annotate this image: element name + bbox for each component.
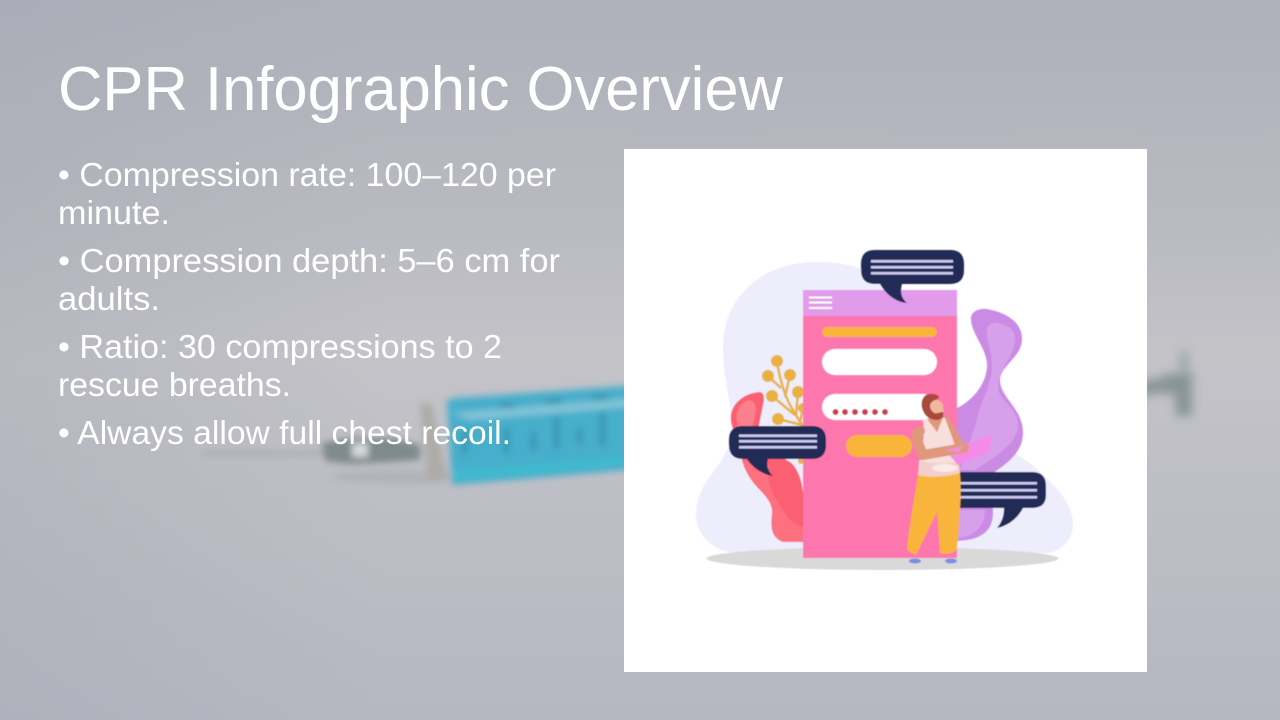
- illustration panel: [624, 149, 1147, 672]
- shoes: [909, 558, 957, 564]
- username field: [822, 349, 937, 375]
- bullet: chest recoil: • Always allow full chest recoil.: [58, 414, 511, 451]
- red blob: [731, 392, 803, 542]
- menu icon: [809, 296, 832, 309]
- speech bubble: right: [945, 472, 1046, 528]
- bullet: compression rate: minute.: [58, 194, 170, 231]
- arm and tablet: [917, 431, 993, 465]
- bullet: compression depth: adults.: [58, 280, 160, 317]
- ground shadow: [706, 547, 1058, 570]
- head: [922, 394, 944, 432]
- password field: [822, 394, 937, 420]
- vest: [918, 418, 960, 477]
- orange heading bar: [822, 327, 937, 337]
- right arm: [946, 420, 961, 446]
- title: CPR Infographic Overview: [58, 55, 783, 124]
- bullet: ratio: [58, 328, 502, 403]
- bullet: compression rate: • Compression rate: 100–120 per: [58, 156, 556, 193]
- speech bubble: top: [861, 250, 964, 303]
- bullet: compression depth: • Compression depth: 5–6 cm for: [58, 242, 560, 279]
- bullet: ratio: • Ratio: 30 compressions to 2: [58, 328, 502, 365]
- purple blob: [957, 309, 1023, 541]
- phone screen: [803, 290, 957, 558]
- man with tablet: [907, 394, 993, 564]
- bullet: compression depth: [58, 242, 560, 317]
- speech bubble: left: [729, 426, 826, 476]
- lavender backdrop blob: [696, 262, 1073, 553]
- bullet: ratio: rescue breaths.: [58, 366, 291, 403]
- yellow branch: [762, 355, 808, 464]
- legs: [907, 473, 961, 555]
- submit button: [846, 435, 912, 457]
- bullet: compression rate: [58, 156, 556, 231]
- bullet list: [58, 156, 560, 451]
